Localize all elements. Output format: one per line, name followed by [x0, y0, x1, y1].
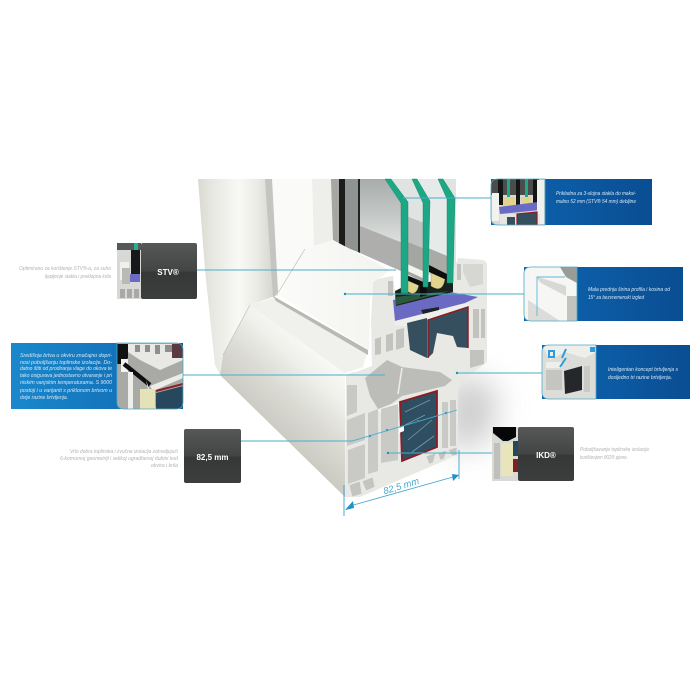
green edge in rebate — [395, 291, 450, 305]
panel: STV — [19, 243, 197, 299]
label: 82,5 mm — [196, 453, 229, 462]
callout lines — [183, 198, 542, 454]
upper profile body — [371, 258, 487, 380]
panel: 82,5 mm: 6-komornoj geometriji i velikoj ugradbenoj dubini kod — [60, 456, 179, 462]
grey sill groove — [273, 296, 368, 355]
grey reveal strip — [265, 179, 278, 298]
panel: sealing concept: dosljedno tri razine brtvljenja. — [608, 375, 672, 381]
dark label box — [518, 427, 574, 481]
description: Vrlo dobra toplinska i zvučna izolacija zahvaljujući — [70, 449, 179, 455]
profile feet — [349, 447, 457, 497]
text: Središnja brtva u okviru značajno dopri- — [20, 353, 112, 359]
upper red steel outline — [428, 307, 468, 358]
drop shadow under window — [445, 372, 498, 452]
lower reinforcement foam — [400, 391, 437, 461]
three green glass panes — [385, 179, 455, 293]
inner white reveal — [272, 179, 314, 293]
sloped sash bead — [278, 240, 390, 350]
panel: 82,5 mm — [60, 429, 241, 483]
text: Inteligentan koncept brtvljenja s — [608, 367, 678, 373]
lower profile body — [345, 350, 463, 497]
spacer white gap — [405, 263, 425, 279]
dark label box — [141, 243, 197, 299]
tan spacer right — [431, 273, 445, 289]
black spacer bars — [404, 274, 427, 297]
thumbnail: glazing rebate — [491, 179, 545, 225]
window cross-section — [198, 179, 487, 497]
panel: 82,5 mm: okvira i krila — [151, 463, 178, 469]
panel: central seal — [11, 343, 183, 409]
upper reinforcement foam right — [428, 307, 468, 358]
sill bevel — [250, 298, 367, 373]
purple gasket strip — [393, 292, 478, 321]
description: Poboljšavanje toplinske izolacije — [580, 447, 649, 453]
frame face — [198, 179, 278, 375]
lower frame sill — [220, 298, 367, 497]
thumbnail: window corner — [524, 267, 577, 321]
glazing area — [331, 179, 456, 284]
dimension annotation: 82,5 mm: 82,5 mm — [382, 476, 421, 497]
upper reinforcement foam left — [407, 318, 427, 358]
thumbnail: IKD foam — [492, 427, 518, 481]
lower profile chambers — [347, 400, 456, 484]
panel: triple glazing: malno 52 mm (STV® 54 mm) debljine — [556, 198, 636, 205]
dimension annotation: 82,5 mm — [344, 450, 459, 516]
panel: IKD — [492, 427, 649, 481]
text — [19, 353, 113, 401]
upper white bed below gasket — [395, 303, 470, 326]
text: postoji i u varijanti s priklonom brtvom u — [19, 388, 112, 394]
panel: slim profile — [524, 267, 683, 321]
glass rebate black seal — [395, 278, 453, 306]
text: tako osigurava jednostavno otvaranje i pri — [20, 373, 113, 379]
text: datno štiti od prodiranja vlage do okova te — [20, 366, 112, 372]
label: IKD® — [536, 451, 556, 460]
panel: triple glazing — [491, 179, 652, 225]
thumbnail: seal detail — [117, 343, 183, 409]
text: dvije razine brtvljenja. — [20, 395, 68, 401]
notch in foam — [399, 426, 404, 433]
upper profile frame chambers — [375, 264, 485, 368]
thumbnail: STV detail — [117, 243, 141, 299]
text: nosi poboljšanju toplinske izolacije. Do- — [20, 360, 112, 366]
panel: sealing concept — [542, 345, 690, 399]
panel: STV: ljepljenje stakla i preklopna krila — [45, 274, 111, 280]
tan spacer left — [406, 278, 419, 293]
description: Optimirano za korištenje STV®-a, za suho — [19, 265, 111, 272]
panel: IKD: korištenjem IKD® pjene. — [580, 454, 628, 461]
thumbnail: sealing detail — [542, 345, 596, 399]
panel: slim profile: 15° za bezvremenski izgled — [588, 295, 645, 301]
text: Mala prednja širina profila i kosina od — [588, 287, 671, 293]
lower profile top cavity — [365, 360, 452, 409]
dark label box — [184, 429, 241, 483]
small black drip bar — [421, 307, 439, 314]
label: STV® — [157, 268, 179, 277]
text: Prikladna za 3-slojna stakla do maksi- — [556, 191, 636, 197]
text: niskim vanjskim temperaturama. S 9000 — [20, 380, 112, 386]
